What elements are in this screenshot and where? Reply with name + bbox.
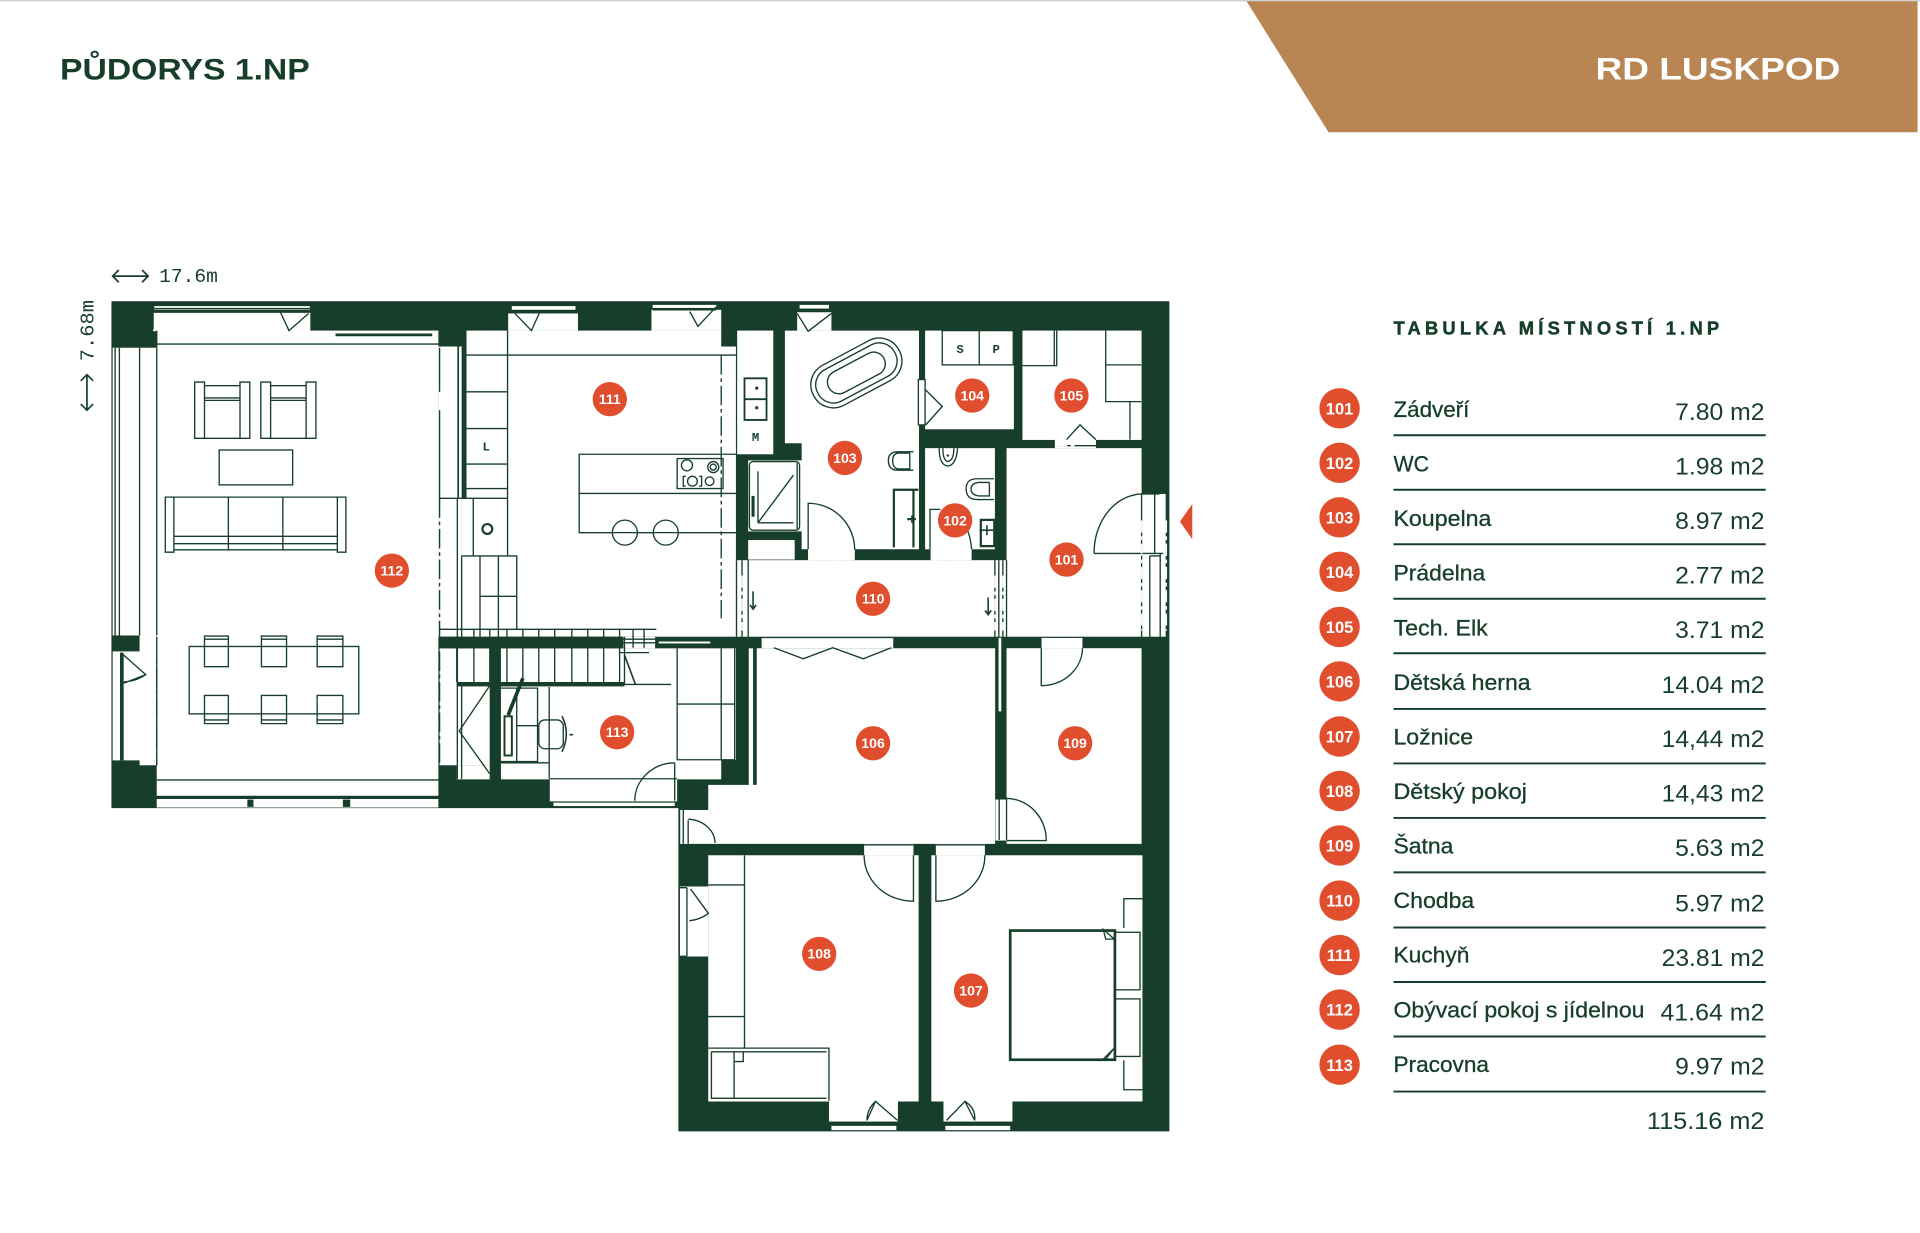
dimension: width 17.6m bbox=[113, 266, 218, 288]
row 103: Koupelna bbox=[1393, 506, 1492, 531]
row 107: 107 bbox=[1326, 728, 1353, 747]
row 108 bbox=[1319, 771, 1766, 818]
row 107: 14,44 m2 bbox=[1662, 726, 1764, 753]
entrance marker bbox=[1180, 504, 1192, 539]
row 113: Pracovna bbox=[1393, 1052, 1490, 1077]
toilet: bathroom bbox=[888, 452, 913, 470]
outer walls bbox=[111, 301, 1169, 1131]
row 106: 106 bbox=[1326, 673, 1353, 692]
laundry cabinets S and P: P bbox=[992, 343, 1000, 357]
row 104: 104 bbox=[1326, 563, 1354, 582]
row 106: Dětská herna bbox=[1393, 670, 1531, 695]
badge 110 bbox=[856, 582, 890, 616]
total area: 115.16 m2 bbox=[1647, 1108, 1764, 1135]
badge 108 bbox=[802, 937, 836, 971]
WC fixtures and door bbox=[930, 448, 994, 560]
row 103: 103 bbox=[1326, 508, 1353, 527]
room table bbox=[1319, 388, 1766, 1135]
title: PŮDORYS 1.NP bbox=[60, 51, 310, 87]
row 108: Dětský pokoj bbox=[1393, 779, 1527, 804]
row 101: 7.80 m2 bbox=[1675, 399, 1764, 426]
laundry door bbox=[918, 380, 942, 425]
bathroom cabinet with sinks: M bbox=[752, 431, 759, 445]
rooms and openings bbox=[113, 305, 1167, 1130]
badge 107 bbox=[954, 973, 988, 1008]
children's room door bbox=[864, 845, 913, 901]
dimension: width 17.6m: 17.6m bbox=[159, 266, 218, 288]
badge 113 bbox=[600, 715, 634, 749]
small window door bbox=[683, 810, 715, 844]
row 106: 14.04 m2 bbox=[1662, 672, 1764, 699]
badge 102 bbox=[938, 503, 972, 538]
badge 101: 101 bbox=[1055, 551, 1078, 567]
entrance door and glazing bbox=[1094, 494, 1166, 637]
row 112: 112 bbox=[1326, 1001, 1353, 1020]
row 110: 5.97 m2 bbox=[1675, 891, 1764, 918]
furniture: sofa bbox=[165, 497, 346, 552]
row 111: 23.81 m2 bbox=[1662, 945, 1764, 972]
children's room side window bbox=[680, 888, 708, 956]
bedroom door bbox=[936, 845, 985, 901]
row 102 bbox=[1319, 443, 1766, 490]
laundry cabinets S and P bbox=[942, 331, 1013, 365]
row 106 bbox=[1319, 661, 1766, 709]
badge 104 bbox=[955, 378, 989, 413]
banner: RD LUSKPOD: RD LUSKPOD bbox=[1596, 51, 1840, 87]
row 107: Ložnice bbox=[1393, 724, 1473, 749]
row 103 bbox=[1319, 497, 1766, 544]
row 109: 5.63 m2 bbox=[1675, 835, 1764, 862]
row 111 bbox=[1319, 935, 1766, 982]
badge 106: 106 bbox=[861, 735, 885, 751]
stairs bbox=[440, 629, 710, 779]
window doors: kitchen and bathroom bbox=[515, 307, 831, 331]
row 109 bbox=[1319, 825, 1766, 872]
badge 108: 108 bbox=[807, 946, 831, 962]
window door: living room top bbox=[280, 312, 309, 331]
row 110: 110 bbox=[1326, 892, 1353, 911]
row 104: 2.77 m2 bbox=[1675, 562, 1764, 589]
badge 103: 103 bbox=[833, 450, 857, 466]
badge 103 bbox=[828, 441, 862, 475]
row 102: WC bbox=[1393, 451, 1429, 476]
wardrobe door bottom bbox=[999, 798, 1046, 841]
tech room cabinets and door bbox=[1022, 331, 1141, 446]
badge 109: 109 bbox=[1063, 735, 1087, 751]
row 113: 113 bbox=[1326, 1056, 1353, 1075]
shower bbox=[749, 462, 800, 530]
badge 105: 105 bbox=[1060, 387, 1083, 403]
study: sofa and wardrobe bbox=[677, 648, 735, 760]
badge 107: 107 bbox=[959, 982, 983, 998]
row 113: 9.97 m2 bbox=[1675, 1053, 1764, 1080]
row 112 bbox=[1319, 989, 1766, 1036]
row 105: Tech. Elk bbox=[1393, 615, 1489, 640]
row 102: 1.98 m2 bbox=[1675, 453, 1764, 480]
row 102: 102 bbox=[1326, 454, 1353, 473]
row 105 bbox=[1319, 607, 1766, 653]
row 109: Šatna bbox=[1393, 833, 1454, 858]
furniture: dining table and chairs bbox=[189, 636, 359, 724]
row 104: Prádelna bbox=[1393, 560, 1486, 585]
folding doors: children's room bbox=[774, 648, 891, 659]
children's room bed bbox=[711, 1052, 827, 1098]
badge 112: 112 bbox=[380, 562, 403, 578]
row 110: Chodba bbox=[1393, 888, 1475, 913]
row 107 bbox=[1319, 716, 1766, 763]
kitchen cabinets bbox=[462, 331, 736, 637]
window door: living room left bbox=[124, 655, 146, 683]
badge 106 bbox=[856, 726, 890, 760]
children's room wardrobe bbox=[708, 855, 829, 1101]
badge 113: 113 bbox=[606, 724, 629, 740]
bathroom cabinet with sinks bbox=[744, 378, 767, 445]
row 111: 111 bbox=[1327, 946, 1352, 965]
badge 111: 111 bbox=[599, 391, 621, 407]
badge 105 bbox=[1054, 378, 1089, 413]
furniture: coffee table bbox=[219, 450, 293, 485]
row 104 bbox=[1319, 552, 1766, 599]
row 108: 108 bbox=[1326, 782, 1353, 801]
badge 109 bbox=[1058, 726, 1092, 760]
bathroom vanity bbox=[894, 490, 918, 547]
row 109: 109 bbox=[1326, 837, 1353, 856]
banner: RD LUSKPOD bbox=[1247, 1, 1918, 132]
row 112: 41.64 m2 bbox=[1660, 1000, 1764, 1027]
row 101 bbox=[1319, 388, 1766, 435]
badge 112 bbox=[375, 553, 409, 588]
row 112: Obývací pokoj s jídelnou bbox=[1393, 998, 1644, 1023]
table heading: TABULKA MÍSTNOSTÍ 1.NP bbox=[1393, 317, 1719, 338]
corridor and structural slits bbox=[659, 560, 1007, 643]
laundry cabinets S and P: S bbox=[956, 343, 964, 357]
bathroom door bbox=[808, 503, 855, 550]
row 101: Zádveří bbox=[1393, 397, 1470, 422]
badge 104: 104 bbox=[960, 387, 984, 403]
row 105: 3.71 m2 bbox=[1675, 617, 1764, 644]
bedroom bed bbox=[1010, 899, 1142, 1090]
bottom window doors bbox=[867, 1101, 975, 1120]
study door bbox=[550, 763, 677, 801]
room number badges bbox=[375, 378, 1092, 1008]
bathtub bbox=[803, 330, 910, 416]
wardrobe door top bbox=[1041, 648, 1082, 686]
wall details and window lines bbox=[115, 309, 508, 807]
floor plan bbox=[111, 301, 1192, 1131]
row 103: 8.97 m2 bbox=[1675, 508, 1764, 535]
dimension: depth 7.68m bbox=[78, 300, 100, 410]
study: desk, monitor and chair bbox=[501, 678, 573, 779]
badge 111 bbox=[593, 382, 627, 416]
badge 110: 110 bbox=[862, 591, 885, 607]
furniture: armchairs bbox=[195, 382, 316, 438]
row 110 bbox=[1319, 880, 1766, 928]
dimension: depth 7.68m: 7.68m bbox=[78, 300, 100, 361]
kitchen cabinets: L bbox=[482, 441, 490, 455]
row 111: Kuchyň bbox=[1393, 942, 1469, 967]
badge 101 bbox=[1049, 542, 1084, 577]
kitchen island with cooktop and stools bbox=[579, 454, 736, 545]
row 101: 101 bbox=[1326, 399, 1353, 418]
kitchen structural line bbox=[720, 355, 722, 618]
badge 102: 102 bbox=[943, 512, 967, 528]
row 108: 14,43 m2 bbox=[1662, 780, 1764, 807]
row 105: 105 bbox=[1326, 618, 1353, 637]
row 113 bbox=[1319, 1044, 1766, 1092]
closet door under stairs bbox=[459, 686, 490, 774]
